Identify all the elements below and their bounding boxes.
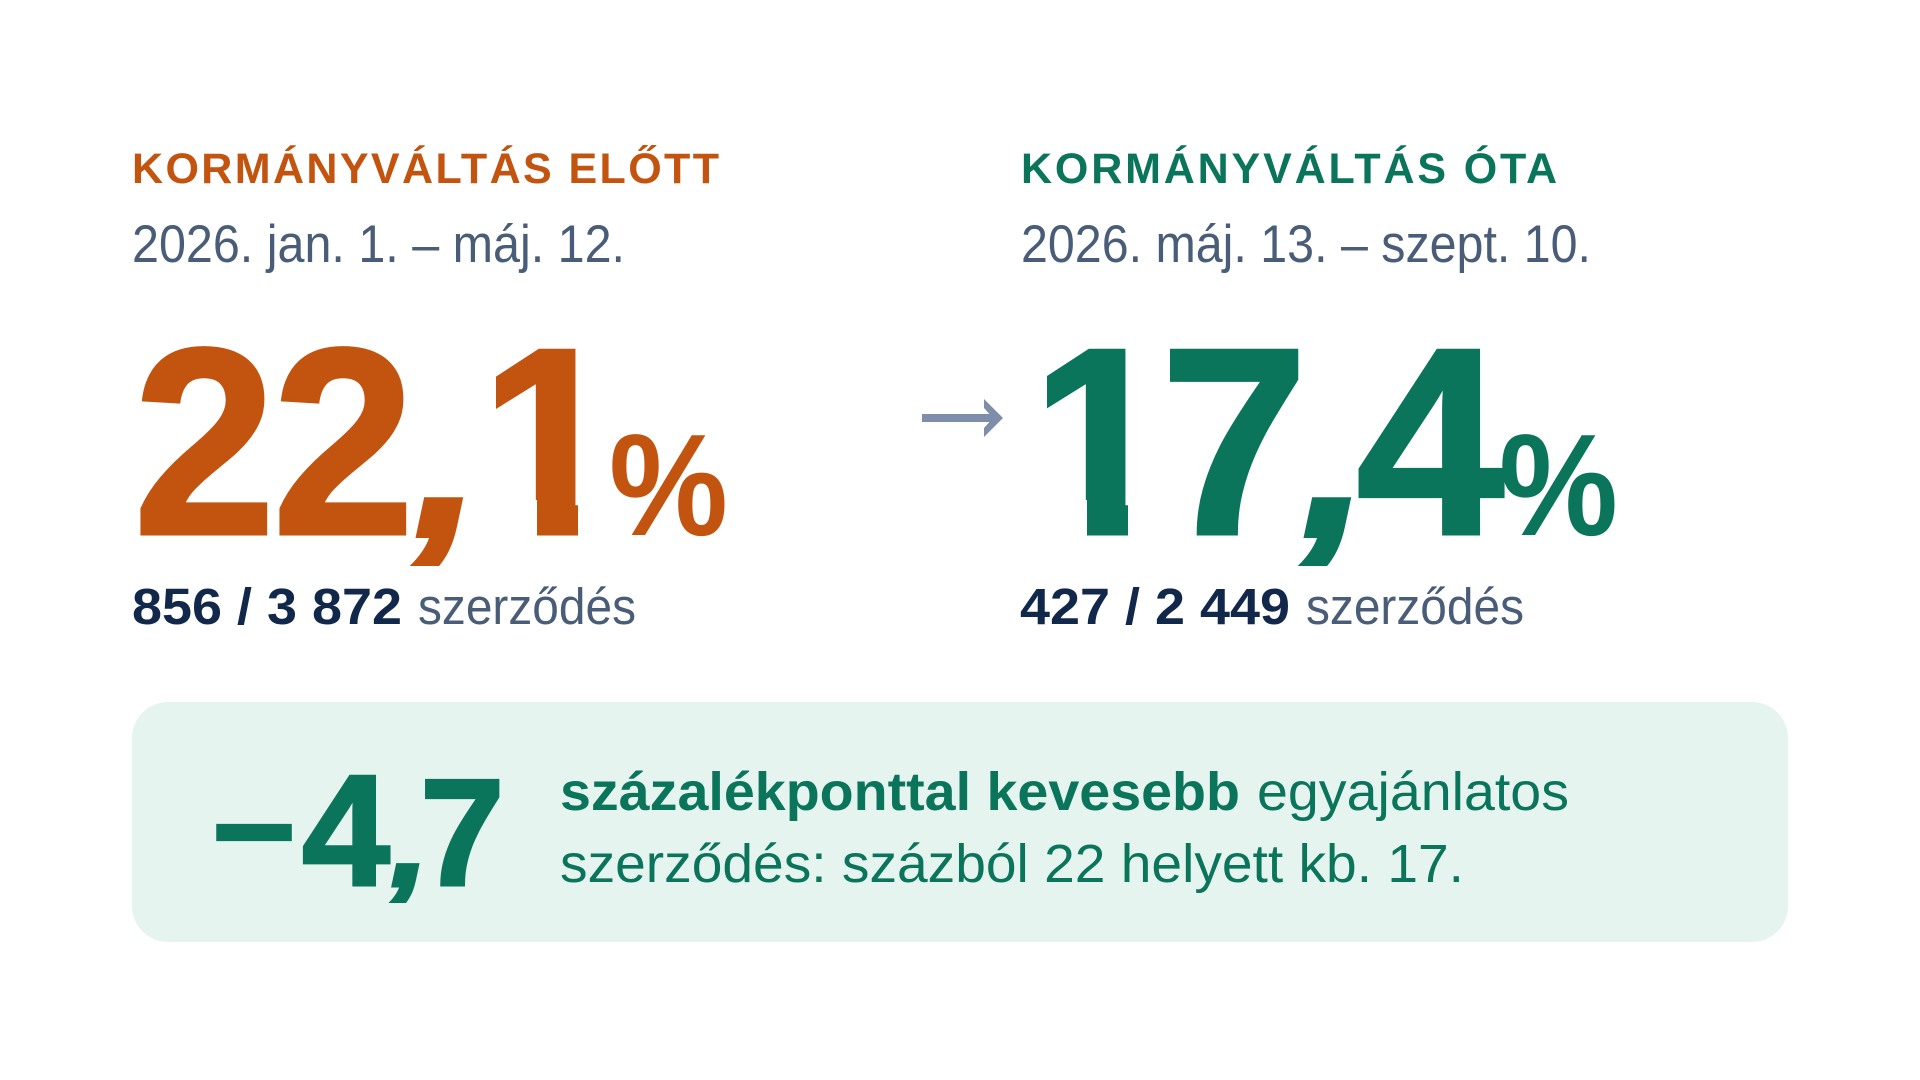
callout number: -4,7: − [210,743,298,919]
callout text [560,762,1569,894]
big number: 17,4%: 4 [1356,292,1506,591]
contract count: before: szerződés [418,578,636,635]
big number: 17,4% [1047,348,1614,566]
icon: arrow [922,399,1003,437]
panel: since government change [1020,144,1618,635]
contract count: since [1020,578,1524,635]
callout number: -4,7 [216,774,500,903]
date range: since: 2026. máj. 13. – szept. 10. [1021,215,1591,274]
big number: 22,1%: 2 [272,292,415,591]
big number: 17,4%: , [1283,336,1396,581]
big number: 22,1%: , [395,336,508,581]
big number: 22,1%: 2 [133,292,276,591]
big number: 22,1%: 1 [475,292,624,591]
heading: since: KORMÁNYVÁLTÁS ÓTA [1021,144,1557,193]
callout text: egyajánlatos [1257,762,1569,822]
big number: 17,4%: 1 [1025,292,1174,591]
callout number: -4,7: , [379,767,446,913]
callout number: -4,7: 7 [420,748,505,918]
contract count: before [132,578,636,635]
callout background [132,702,1788,942]
contract count: since: 427 / 2 449 [1020,578,1290,635]
contract count: since: szerződés [1306,578,1524,635]
callout: difference [132,702,1788,942]
date range: before: 2026. jan. 1. – máj. 12. [132,215,625,274]
big number: 17,4%: 7 [1160,292,1308,591]
heading: before: KORMÁNYVÁLTÁS ELŐTT [132,145,719,193]
big number: 22,1% [140,346,724,566]
callout text: százalékponttal kevesebb [560,762,1240,822]
panel: before government change [132,145,728,635]
callout number: -4,7: 4 [302,743,390,919]
big number: 17,4%: % [1499,404,1618,566]
contract count: before: 856 / 3 872 [132,578,402,635]
callout text: szerződés: százból 22 helyett kb. 17. [560,834,1464,894]
big number: 22,1%: % [609,404,728,566]
